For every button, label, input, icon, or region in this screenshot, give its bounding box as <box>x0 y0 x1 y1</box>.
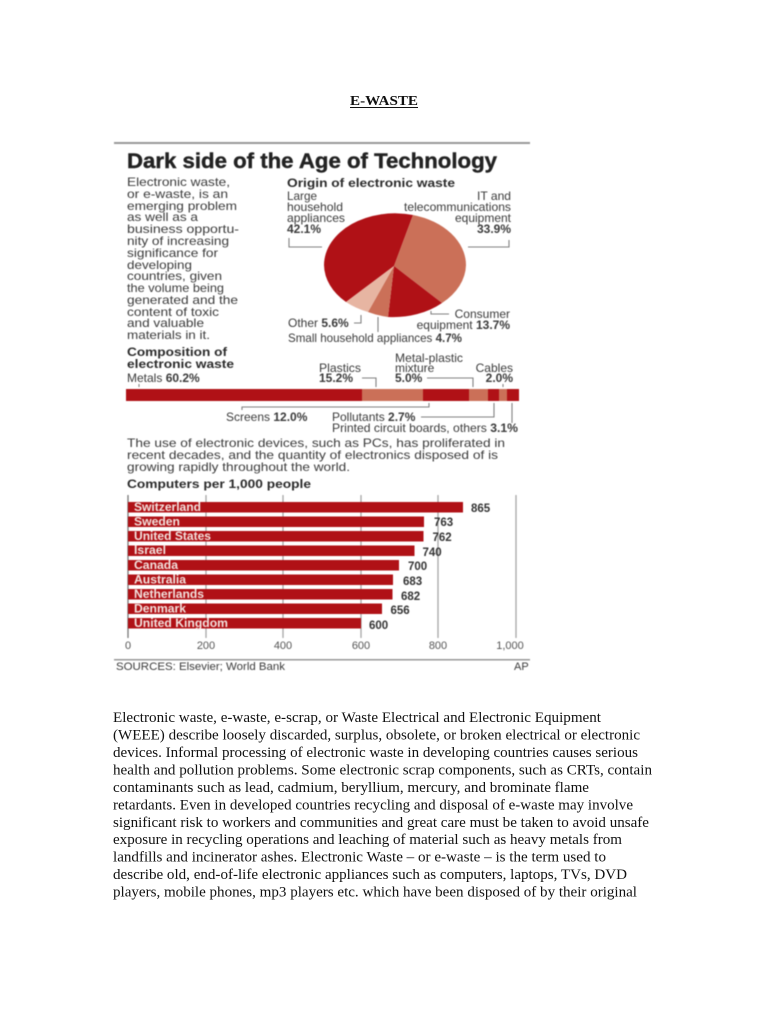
country labels: Sweden <box>134 516 180 528</box>
axis labels: 400 <box>274 640 292 652</box>
sources footer: SOURCES: Elsevier; World Bank <box>116 661 286 673</box>
country labels: Israel <box>134 545 166 557</box>
body paragraph: describe old, end-of-life electronic appliances such as computers, laptops, TVs, DVD <box>113 867 627 883</box>
label: printed circuit boards: Printed circuit boards, others 3.1% <box>332 421 518 435</box>
body paragraph: exposure in recycling operations and leaching of material such as heavy metals from <box>113 832 622 848</box>
label: metal-plastic mixture: Metal-plastic <box>395 351 463 365</box>
bar values: 656 <box>390 605 410 617</box>
infographic panel <box>114 142 530 673</box>
intro text block <box>127 175 239 342</box>
intro text block: the volume being <box>127 281 224 295</box>
bar chart: computers per 1,000 people <box>125 479 524 652</box>
intro text block: emerging problem <box>127 199 237 213</box>
label: pollutants <box>332 403 494 424</box>
label: screens: Screens 12.0% <box>226 410 308 424</box>
body paragraph <box>113 710 653 900</box>
country labels: Denmark <box>134 604 187 616</box>
label: plastics: 15.2% <box>319 371 353 385</box>
bar values <box>369 503 491 632</box>
country labels: Switzerland <box>134 502 201 514</box>
intro text block: materials in it. <box>127 328 210 342</box>
infographic heading: Dark side of the Age of Technology <box>127 150 497 173</box>
pie section heading: Origin of electronic waste <box>287 178 455 190</box>
axis labels: 600 <box>352 640 370 652</box>
intro text block: significance for <box>127 246 218 260</box>
intro text block: Electronic waste, <box>127 175 230 189</box>
country labels <box>134 502 228 630</box>
axis labels: 0 <box>125 640 131 652</box>
bar chart heading: Computers per 1,000 people <box>127 479 311 491</box>
axis labels: 200 <box>197 640 215 652</box>
intro text block: as well as a <box>127 210 198 224</box>
intro text block: nity of increasing <box>127 234 229 248</box>
label: large household appliances: appliances <box>287 211 345 225</box>
intro text block: or e-waste, is an <box>127 187 228 201</box>
label: screens <box>226 403 429 424</box>
body paragraph: health and pollution problems. Some electronic scrap components, such as CRTs, contain <box>113 762 653 778</box>
sources footer: AP <box>514 661 529 673</box>
composition heading: electronic waste <box>127 359 234 371</box>
country labels: Canada <box>134 560 179 572</box>
usage text block: growing rapidly throughout the world. <box>127 460 350 474</box>
bar values: 762 <box>432 532 452 544</box>
country labels: Australia <box>134 574 187 586</box>
label: metal-plastic mixture <box>395 351 473 387</box>
label: cables: 2.0% <box>486 371 513 385</box>
country labels: United Kingdom <box>134 618 228 630</box>
bar values: 683 <box>403 576 422 588</box>
bar values: 600 <box>369 620 388 632</box>
body paragraph: landfills and incinerator ashes. Electronic Waste – or e-waste – is the term used to <box>113 850 606 866</box>
label: consumer equipment: equipment 13.7% <box>417 318 510 332</box>
label: plastics: Plastics <box>319 361 361 375</box>
bar values: 865 <box>471 503 491 515</box>
composition heading <box>127 347 234 371</box>
intro text block: content of toxic <box>127 305 219 319</box>
usage text block: The use of electronic devices, such as PCs, has proliferated in <box>127 436 505 450</box>
label: cables <box>476 361 513 387</box>
usage text block: recent decades, and the quantity of electronics disposed of is <box>127 448 498 462</box>
sources footer <box>114 659 530 673</box>
body paragraph: (WEEE) describe loosely discarded, surplus, obsolete, or broken electrical or electronic <box>113 728 640 744</box>
pie chart <box>324 213 466 317</box>
body paragraph: significant risk to workers and communities and great care must be taken to avoid unsafe <box>113 815 649 831</box>
body paragraph: Electronic waste, e-waste, e-scrap, or Waste Electrical and Electronic Equipment <box>113 710 602 726</box>
label: IT and telecommunications equipment <box>404 189 512 247</box>
usage text block <box>127 436 505 474</box>
label: small household appliances: Small household appliances 4.7% <box>288 331 462 345</box>
label: large household appliances: 42.1% <box>287 222 321 236</box>
intro text block: generated and the <box>127 293 238 307</box>
label: metal-plastic mixture: mixture <box>395 361 435 375</box>
label: consumer equipment: Consumer <box>455 307 510 321</box>
label: large household appliances: household <box>287 200 343 214</box>
body paragraph: devices. Informal processing of electronic waste in developing countries causes serious <box>113 745 638 761</box>
label: cables: Cables <box>476 361 513 375</box>
grid lines <box>128 495 516 638</box>
intro text block: developing <box>127 258 192 272</box>
country labels: Netherlands <box>134 589 204 601</box>
label: metals: Metals 60.2% <box>127 371 200 385</box>
bar values: 763 <box>434 517 453 529</box>
country labels: United States <box>134 531 211 543</box>
pie section: origin of electronic waste <box>287 178 512 345</box>
label: IT and telecommunications equipment: IT and <box>477 189 511 203</box>
page title: E-WASTE <box>350 94 418 109</box>
axis labels: 1,000 <box>496 640 524 652</box>
intro text block: countries, given <box>127 269 222 283</box>
intro text block: business opportu- <box>127 222 239 236</box>
label: metal-plastic mixture: 5.0% <box>395 371 423 385</box>
bar values: 700 <box>408 561 427 573</box>
axis labels <box>125 640 524 652</box>
intro text block: and valuable <box>127 316 204 330</box>
label: large household appliances: Large <box>287 189 317 203</box>
label: IT and telecommunications equipment: telecommunications <box>404 200 511 214</box>
label: consumer equipment <box>417 307 510 332</box>
bars <box>128 502 463 628</box>
composition heading: Composition of <box>127 347 227 359</box>
bar values: 682 <box>401 591 420 603</box>
label: IT and telecommunications equipment: equipment <box>455 211 512 225</box>
body paragraph: players, mobile phones, mp3 players etc. which have been disposed of by their original <box>113 884 637 900</box>
label: IT and telecommunications equipment: 33.9% <box>477 222 511 236</box>
composition section <box>126 347 519 435</box>
body paragraph: retardants. Even in developed countries recycling and disposal of e-waste may involve <box>113 798 633 814</box>
body paragraph: contaminants such as lead, cadmium, beryllium, mercury, and brominate flame <box>113 780 589 796</box>
label: plastics <box>319 361 376 387</box>
bar values: 740 <box>422 547 442 559</box>
axis labels: 800 <box>429 640 447 652</box>
label: large household appliances <box>287 189 345 247</box>
label: other: Other 5.6% <box>288 316 349 330</box>
stacked bar <box>126 389 519 401</box>
label: pollutants: Pollutants 2.7% <box>332 410 416 424</box>
